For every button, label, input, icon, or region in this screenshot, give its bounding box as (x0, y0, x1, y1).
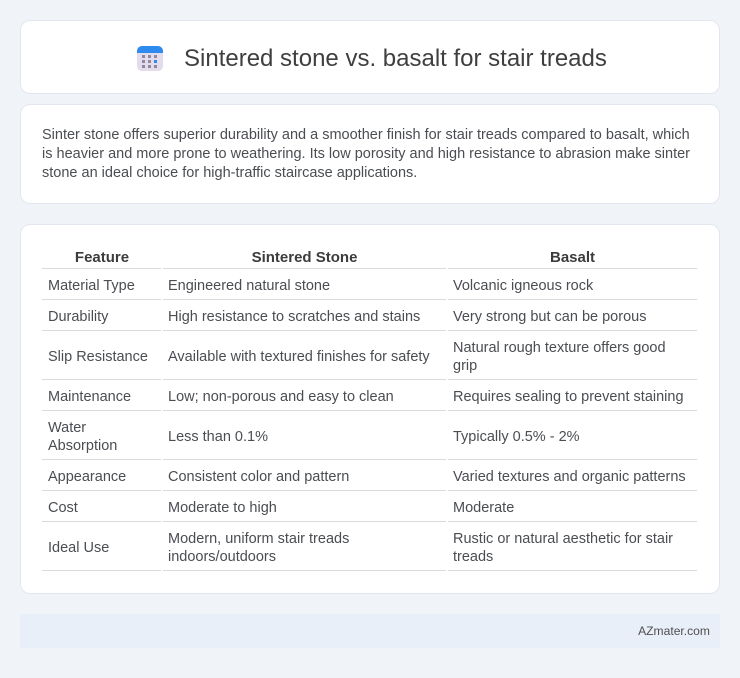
row: slip resistance (48, 340, 666, 374)
row: durability: High resistance to scratches and stains (168, 309, 420, 325)
row: cost: Cost (48, 500, 78, 516)
footer bar (20, 614, 720, 648)
comparison table panel (20, 224, 720, 594)
row: material type: Engineered natural stone (168, 278, 330, 294)
row: durability: Durability (48, 309, 108, 325)
row: ideal use: Ideal Use (48, 540, 109, 556)
row: maintenance (48, 389, 684, 405)
row: water absorption: Water (48, 420, 86, 436)
row: water absorption: Typically 0.5% - 2% (453, 429, 580, 445)
row: cost: Moderate (453, 500, 514, 516)
header card (20, 20, 720, 94)
table header row: Feature (75, 249, 129, 266)
row: durability: Very strong but can be porous (453, 309, 646, 325)
table header row: Basalt (550, 249, 595, 266)
row: ideal use: indoors/outdoors (168, 549, 276, 565)
row: appearance: Varied textures and organic patterns (453, 469, 686, 485)
row: appearance (48, 469, 686, 485)
intro paragraph: stone an ideal choice for high-traffic staircase applications. (42, 165, 417, 181)
row: ideal use: treads (453, 549, 493, 565)
row: water absorption (48, 420, 580, 454)
row: slip resistance: Slip Resistance (48, 349, 148, 365)
row: material type: Volcanic igneous rock (453, 278, 593, 294)
row: cost: Moderate to high (168, 500, 277, 516)
row: ideal use: Rustic or natural aesthetic for stair (453, 531, 673, 547)
row: slip resistance: Available with textured finishes for safety (168, 349, 430, 365)
row: water absorption: Less than 0.1% (168, 429, 268, 445)
row: material type: Material Type (48, 278, 135, 294)
title: Sintered stone vs. basalt for stair treads (184, 45, 607, 72)
row: appearance: Consistent color and pattern (168, 469, 349, 485)
comparison table (42, 249, 697, 571)
row: slip resistance: Natural rough texture offers good (453, 340, 666, 356)
table header row (75, 249, 595, 266)
intro paragraph (42, 127, 690, 181)
row: durability (48, 309, 646, 325)
row: cost (48, 500, 514, 516)
row: maintenance: Low; non-porous and easy to clean (168, 389, 394, 405)
row: maintenance: Maintenance (48, 389, 131, 405)
row: water absorption: Absorption (48, 438, 117, 454)
row: ideal use: Modern, uniform stair treads (168, 531, 349, 547)
intro paragraph: Sinter stone offers superior durability and a smoother finish for stair treads compared to basalt, which (42, 127, 690, 143)
row: material type (48, 278, 594, 294)
row: ideal use (48, 531, 673, 565)
intro paragraph: is heavier and more prone to weathering. Its low porosity and high resistance to abrasion make sinter (42, 146, 690, 162)
row: slip resistance: grip (453, 358, 477, 374)
row: appearance: Appearance (48, 469, 126, 485)
row: maintenance: Requires sealing to prevent staining (453, 389, 684, 405)
icon: calendar (137, 46, 163, 71)
intro text panel (20, 104, 720, 204)
footer source text: AZmater.com (638, 624, 710, 638)
table header row: Sintered Stone (252, 249, 357, 266)
